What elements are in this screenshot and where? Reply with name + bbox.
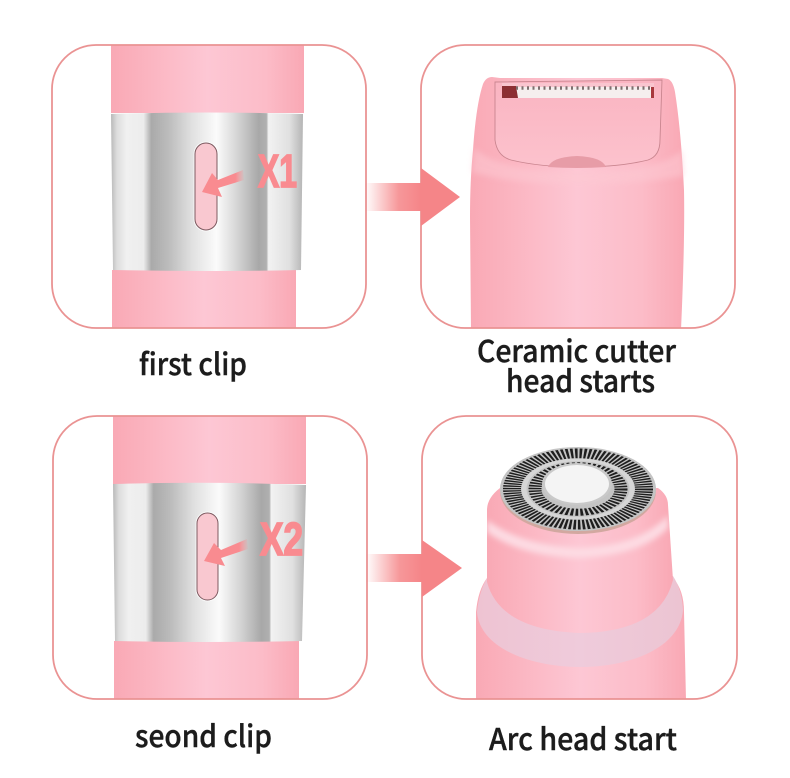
caption: ceramic cutter head starts: head starts (506, 357, 655, 401)
panel frame (53, 416, 367, 699)
panel: second clip device (53, 416, 367, 699)
arrow: second step (366, 540, 462, 597)
panel frame (421, 45, 735, 328)
caption: second clip: seond clip (135, 712, 272, 756)
caption: first clip: first clip (139, 340, 247, 384)
panel: first clip device (52, 45, 366, 328)
caption: ceramic cutter head starts: Ceramic cutter (477, 327, 677, 371)
device body: switch section (111, 45, 304, 328)
panel: ceramic cutter head (421, 45, 735, 330)
arrow: press direction (202, 170, 244, 197)
label: X1: X1 (258, 145, 297, 197)
arrow: press direction (204, 539, 248, 566)
panel frame (52, 45, 366, 328)
panel frame (422, 416, 737, 699)
device: ceramic cutter (470, 77, 684, 330)
device: arc head (476, 447, 686, 700)
arrow: first step (365, 168, 460, 226)
label: X2: X2 (260, 513, 303, 565)
caption: ceramic cutter head starts (477, 327, 677, 401)
panel: arc head (422, 416, 737, 700)
device body: switch section (113, 416, 306, 699)
caption: arc head start: Arc head start (489, 715, 677, 759)
